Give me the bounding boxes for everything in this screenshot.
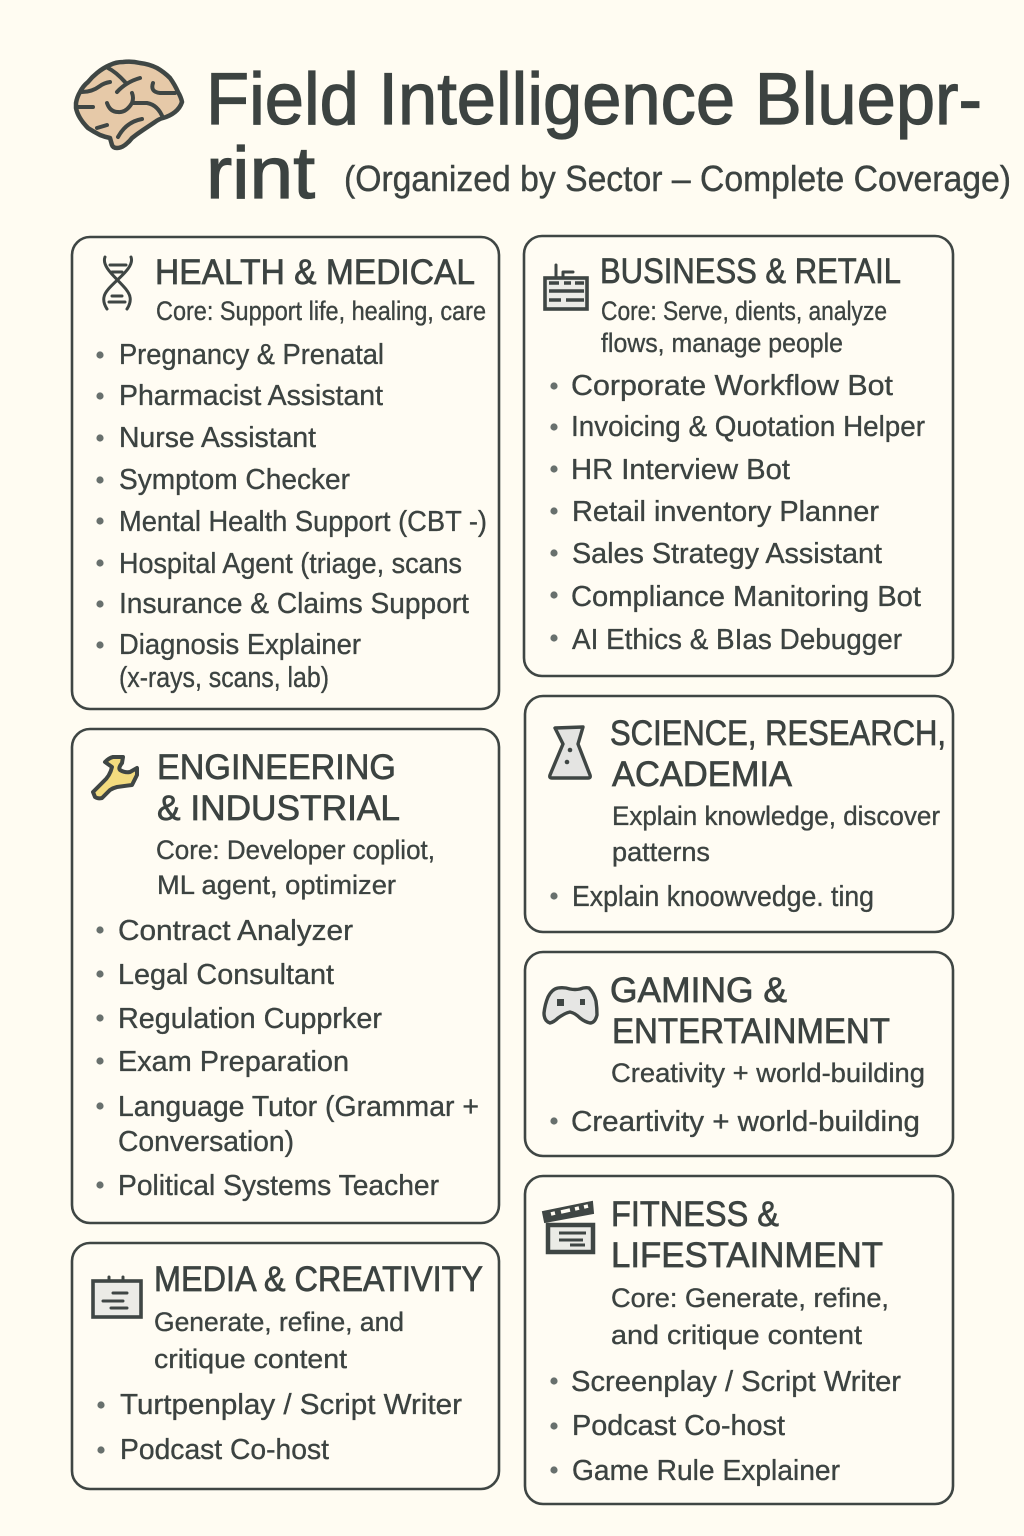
core description [154,1307,404,1374]
core description [612,801,940,867]
core description: Core: Generate, refine, [611,1283,889,1313]
list item: Explain knoowvedge. ting [572,881,874,913]
list of roles: Turtpenplay / Script Writer [120,1389,462,1421]
heading [157,748,400,828]
heading: GAMING & [610,971,787,1010]
core description: Core: Serve, dients, analyze [601,296,887,326]
list of roles [96,339,487,694]
list of roles [550,1366,901,1487]
heading: ENTERTAINMENT [612,1012,890,1051]
list of roles: Insurance & Claims Support [119,588,469,620]
core description: ML agent, optimizer [157,870,396,900]
list of roles: Mental Health Support (CBT -) [119,506,487,538]
panel: business and retail [524,236,953,676]
list of roles: AI Ethics & BIas Debugger [572,624,902,656]
icon: flask [550,727,590,778]
list of roles: Political Systems Teacher [118,1170,439,1202]
panel: fitness and lifestainment [525,1176,953,1504]
core description: Generate, refine, and [154,1307,404,1337]
list of roles: Game Rule Explainer [572,1455,840,1487]
heading [610,714,946,794]
list of roles: Screenplay / Script Writer [571,1366,901,1398]
core description: critique content [154,1344,348,1374]
heading: BUSINESS & RETAIL [600,252,901,291]
list of roles [96,915,479,1202]
list of roles: Nurse Assistant [119,422,316,454]
core description: Core: Developer copliot, [156,835,435,865]
list of roles [97,1389,462,1466]
heading [611,1195,883,1275]
core description [156,835,435,900]
core description [601,296,887,358]
panel: health and medical [72,237,499,709]
title: Field Intelligence Bluepr- [206,59,982,140]
panel: gaming and entertainment [525,952,953,1156]
panel: engineering and industrial [72,729,499,1223]
heading: FITNESS & [611,1195,779,1234]
list of roles: Retail inventory Planner [572,496,879,528]
list of roles: Podcast Co-host [120,1434,329,1466]
heading: MEDIA & CREATIVITY [154,1260,483,1299]
panel: science, research, academia [525,696,953,932]
list of roles: Diagnosis Explainer [119,629,361,661]
list of roles: Contract Analyzer [118,915,353,947]
core description: Explain knowledge, discover [612,801,940,831]
list of roles [550,370,925,656]
heading: ENGINEERING [157,748,396,787]
core description: and critique content [611,1320,863,1350]
icon: presentation board [93,1277,141,1317]
list of roles: Pregnancy & Prenatal [119,339,384,371]
heading: LIFESTAINMENT [611,1236,883,1275]
title: rint [206,133,315,214]
list of roles: Language Tutor (Grammar + [118,1091,479,1123]
icon: brain [76,62,182,148]
list of roles: Regulation Cupprker [118,1003,382,1035]
list of roles: Podcast Co-host [572,1410,785,1442]
title [206,59,982,214]
list of roles: (x-rays, scans, lab) [119,662,329,694]
heading: HEALTH & MEDICAL [155,253,475,292]
core description: Core: Support life, healing, care [156,296,486,326]
list of roles: Conversation) [118,1126,294,1158]
list of roles: HR Interview Bot [571,454,790,486]
list of roles: Invoicing & Quotation Helper [571,411,925,443]
heading: & INDUSTRIAL [157,789,400,828]
panel: media and creativity [72,1243,499,1489]
core description: flows, manage people [601,328,843,358]
core description [611,1283,889,1350]
list of roles: Sales Strategy Assistant [572,538,882,570]
icon: game controller [544,988,597,1023]
list of roles: Hospital Agent (triage, scans [119,548,462,580]
list item: Creartivity + world-building [571,1106,920,1138]
list of roles: Legal Consultant [118,959,334,991]
icon: DNA helix [104,257,132,309]
list of roles: Corporate Workflow Bot [571,370,893,402]
icon: wrench [93,757,137,798]
list of roles: Pharmacist Assistant [119,380,383,412]
core description: patterns [612,837,710,867]
heading [610,971,890,1051]
list of roles: Exam Preparation [118,1046,349,1078]
icon: office building [545,265,587,309]
heading: ACADEMIA [612,755,793,794]
heading: SCIENCE, RESEARCH, [610,714,946,753]
core description: Creativity + world-building [611,1058,925,1088]
icon: film clapperboard [543,1202,593,1252]
list of roles: Compliance Manitoring Bot [571,581,921,613]
list of roles: Symptom Checker [119,464,350,496]
